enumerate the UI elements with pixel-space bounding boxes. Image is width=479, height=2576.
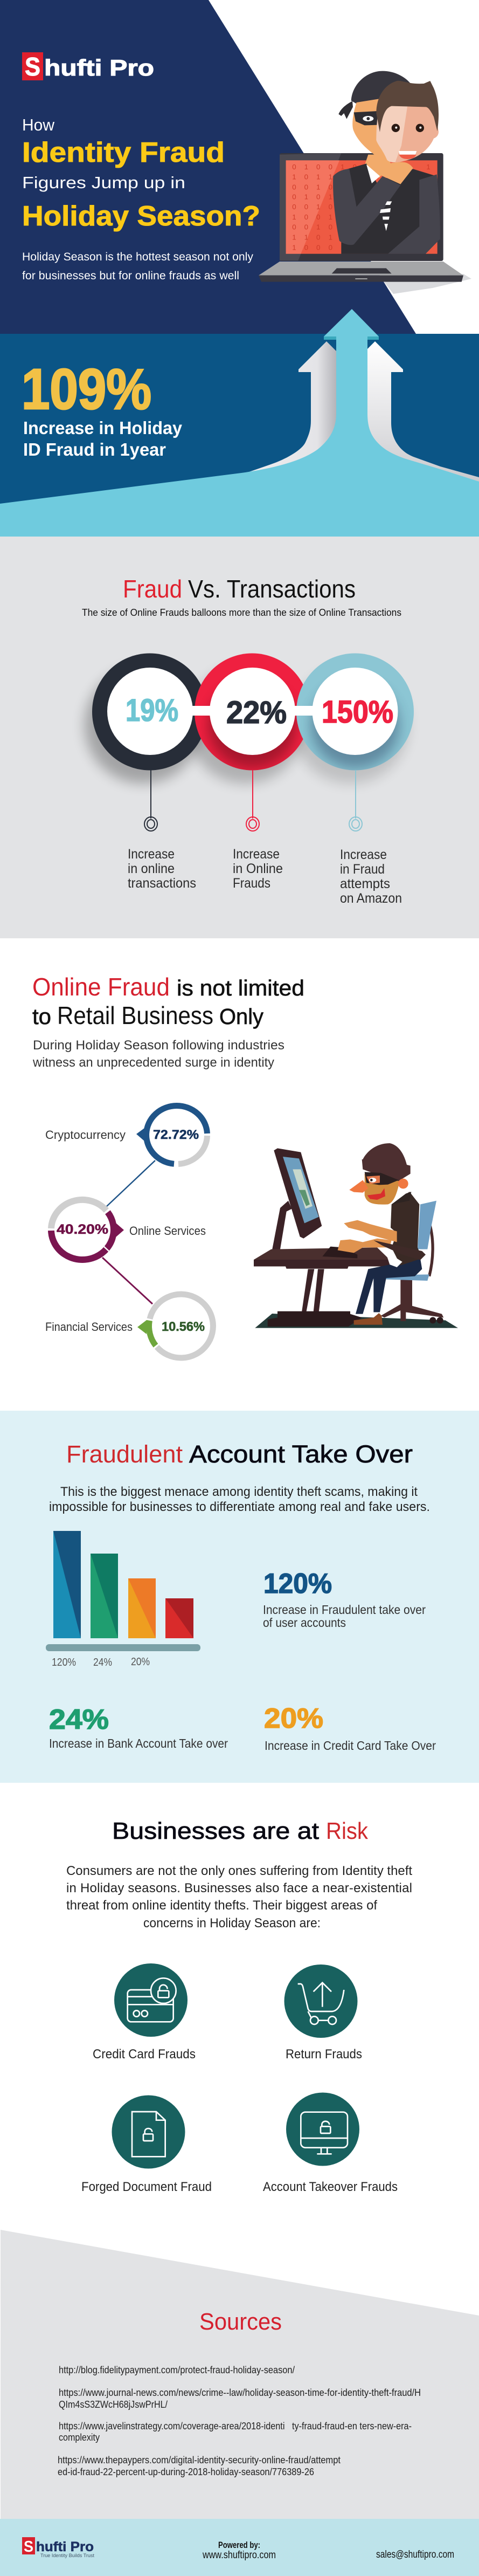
intro text [49, 1485, 430, 1514]
label: online services: Online Services [129, 1224, 206, 1238]
illustration: hacker at computer [254, 1143, 458, 1328]
intro text [66, 1864, 412, 1931]
heading: to [32, 1004, 51, 1029]
illustration: fraudster with mask in laptop: 1 [292, 243, 296, 251]
donut: online services [51, 1200, 124, 1260]
logo: Shufti Pro: hufti Pro [44, 55, 154, 80]
illustration: fraudster with mask in laptop: 0 [304, 213, 308, 221]
illustration: fraudster with mask in laptop: 0 [353, 163, 357, 171]
heading [123, 575, 356, 603]
arrow: left white [241, 341, 336, 475]
source list: https://www.thepaypers.com/digital-identity-security-online-fraud/attempt [58, 2455, 341, 2465]
illustration: fraudster with mask in laptop: 0 [316, 163, 320, 171]
illustration: fraudster with mask in laptop: 0 [292, 223, 296, 231]
illustration: fraudster with mask in laptop: 0 [316, 243, 320, 251]
heading: Risk [326, 1818, 369, 1844]
illustration: fraudster with mask in laptop: 0 [292, 193, 296, 201]
label: return frauds: Return Frauds [286, 2047, 362, 2062]
navy background [0, 0, 416, 334]
illustration: fraudster with mask in laptop: 1 [329, 213, 332, 221]
source list: https://www.javelinstrategy.com/coverage-area/2018-identi ty-fraud-fraud-en ters-new-era- [59, 2421, 412, 2431]
chart: bars: 120% [52, 1657, 76, 1668]
intro text: threat from online identity thefts. Their biggest areas of [66, 1898, 377, 1913]
illustration: fraudster with mask in laptop: 0 [304, 173, 308, 181]
illustration: fraudster with mask in laptop: 0 [304, 223, 308, 231]
illustration: fraudster with mask in laptop: 1 [316, 173, 320, 181]
label: amazon: Increase [340, 847, 387, 862]
stat: 20%: 20% [264, 1703, 323, 1734]
illustration: fraudster with mask in laptop: 1 [304, 233, 308, 242]
heading: Online Fraud [32, 973, 170, 1001]
illustration: fraudster with mask in laptop: 0 [329, 163, 332, 171]
arrow: right white [367, 341, 479, 485]
stat: 150%: 150% [322, 695, 393, 730]
label: amazon: attempts [340, 876, 390, 891]
logo: Shufti Pro footer [22, 2537, 94, 2558]
illustration: fraudster with mask in laptop: 1 [304, 193, 308, 201]
intro text: Consumers are not the only ones suffering from Identity theft [66, 1864, 412, 1878]
icon: account takeover monitor [286, 2092, 359, 2166]
label: online transactions [128, 847, 196, 891]
heading: is not limited [177, 976, 304, 1000]
intro text: impossible for businesses to differentiate among real and fake users. [49, 1500, 430, 1514]
panel: fraud vs transactions [0, 537, 479, 938]
label: 120% [263, 1603, 426, 1630]
illustration: fraudster with mask in laptop: 0 [329, 243, 332, 251]
powered by: www.shuftipro.com [202, 2550, 276, 2561]
illustration: fraudster with mask in laptop [259, 71, 463, 282]
logo: Shufti Pro footer: True Identity Builds Trust [40, 2553, 94, 2558]
illustration: fraudster with mask in laptop: 0 [329, 203, 332, 211]
label: online transactions: Increase [128, 847, 175, 862]
heading: Only [219, 1004, 263, 1029]
source list [58, 2365, 421, 2477]
label: 120%: of user accounts [263, 1616, 346, 1630]
illustration: fraudster with mask in laptop: 0 [292, 183, 296, 191]
laptop shadow [384, 274, 471, 294]
stat: 109%: 109% [22, 358, 151, 421]
label: amazon [340, 847, 402, 906]
heading: Businesses are at [112, 1818, 319, 1844]
logo: Shufti Pro footer: S [24, 2538, 33, 2556]
panel: hero [0, 0, 479, 334]
illustration: fraudster with mask in laptop: 0 [316, 233, 320, 242]
hero text [22, 251, 253, 282]
hero text: for businesses but for online frauds as well [22, 270, 239, 282]
source list: complexity [59, 2432, 100, 2443]
connector: red [246, 770, 259, 831]
illustration: fraudster with mask in laptop: 1 [329, 233, 332, 242]
title: Figures Jump up in [22, 173, 185, 192]
contact email: sales@shuftipro.com [376, 2549, 454, 2560]
chart: bars [46, 1531, 200, 1668]
panel: businesses at risk [0, 1783, 479, 2230]
heading: Fraudulent [66, 1440, 183, 1468]
donut: online services: 40.20% [57, 1222, 108, 1237]
icons: risk areas [112, 1963, 359, 2169]
title: Identity Fraud [22, 137, 225, 168]
label: online frauds: Increase [233, 847, 280, 862]
donut: cryptocurrency: 72.72% [153, 1128, 199, 1142]
heading: Retail Business [57, 1001, 213, 1029]
illustration: fraudster with mask in laptop: 0 [304, 203, 308, 211]
stat label: Increase in Holiday [23, 418, 183, 438]
icon: credit card [114, 1963, 188, 2037]
illustration: fraudster with mask in laptop: 0 [304, 243, 308, 251]
stat: 22%: 22% [226, 695, 287, 730]
label: forged document fraud: Forged Document Fraud [81, 2180, 212, 2194]
label: account takeover frauds: Account Takeover Frauds [263, 2180, 398, 2194]
subheading: The size of Online Frauds balloons more than the size of Online Transactions [82, 607, 401, 618]
panel: sources [1, 2230, 479, 2519]
title: Holiday Season? [22, 201, 260, 232]
stat: 120%: 120% [263, 1568, 332, 1599]
stat label: ID Fraud in 1year [23, 439, 166, 459]
intro text: During Holiday Season following industries [33, 1038, 284, 1053]
illustration: fraudster with mask in laptop: 1 [292, 173, 296, 181]
panel: online fraud industries [0, 938, 479, 1411]
label: amazon: in Fraud [340, 862, 385, 877]
title: How [22, 115, 55, 134]
illustration: fraudster with mask in laptop: 1 [292, 213, 296, 221]
illustration: fraudster with mask in laptop: 0 [329, 223, 332, 231]
illustration: fraudster with mask in laptop: 0 [316, 193, 320, 201]
heading: Account Take Over [189, 1440, 413, 1468]
label: 20%: Increase in Credit Card Take Over [265, 1739, 436, 1753]
label: financial services: Financial Services [45, 1320, 133, 1334]
label: credit card frauds: Credit Card Frauds [93, 2047, 196, 2062]
hero text: Holiday Season is the hottest season not only [22, 251, 253, 263]
panel: footer [0, 2519, 479, 2576]
intro text [32, 1038, 284, 1070]
connector: dark [144, 770, 157, 831]
illustration: fraudster with mask in laptop: 0 [292, 163, 296, 171]
title [22, 115, 260, 232]
chart: bars: 20% [131, 1656, 150, 1668]
illustration: fraudster with mask in laptop: 1 [329, 193, 332, 201]
logo: Shufti Pro [22, 52, 154, 81]
illustration: fraudster with mask in laptop: 1 [316, 183, 320, 191]
logo: Shufti Pro: S [25, 53, 40, 81]
heading [66, 1440, 413, 1468]
donut: financial services [137, 1294, 213, 1358]
connector lines [102, 1160, 155, 1304]
heading [32, 973, 304, 1029]
illustration: fraudster with mask in laptop: 1 [329, 173, 332, 181]
source list: http://blog.fidelitypayment.com/protect-fraud-holiday-season/ [59, 2365, 295, 2375]
heading: Vs. Transactions [188, 575, 356, 603]
illustration: fraudster with mask in laptop: 1 [341, 163, 344, 171]
illustration: fraudster with mask in laptop: 0 [304, 183, 308, 191]
stat: 19%: 19% [126, 693, 178, 728]
source list: QIm4sS3ZWcH68jJswPrHL/ [59, 2399, 168, 2410]
illustration: fraudster with mask in laptop: 1 [316, 203, 320, 211]
label: online frauds: Frauds [233, 876, 270, 891]
label: 24%: Increase in Bank Account Take over [49, 1736, 228, 1750]
source list: https://www.journal-news.com/news/crime--law/holiday-season-time-for-identity-theft-fraud/H [59, 2387, 421, 2398]
logo: Shufti Pro footer: hufti Pro [36, 2539, 94, 2554]
powered by: Powered by: [218, 2540, 260, 2550]
label: online frauds [233, 847, 283, 891]
illustration: fraudster with mask in laptop: 0 [316, 213, 320, 221]
icon: forged document [112, 2096, 185, 2169]
source list: ed-id-fraud-22-percent-up-during-2018-holiday-season/776389-26 [58, 2467, 314, 2477]
intro text: This is the biggest menace among identity theft scams, making it [60, 1485, 418, 1499]
panel: 109% banner [0, 309, 479, 537]
label: online transactions: in online [128, 861, 175, 876]
arrow: central light blue with base [0, 309, 479, 537]
powered by [202, 2540, 276, 2561]
donut: cryptocurrency [136, 1106, 207, 1164]
illustration: fraudster with mask in laptop: 1 [426, 163, 431, 171]
connector: blue [349, 770, 362, 831]
panel: fraudulent account take over [0, 1411, 479, 1783]
label: cryptocurrency: Cryptocurrency [45, 1128, 126, 1142]
heading: Fraud [123, 575, 182, 603]
icon: return cart [284, 1964, 358, 2038]
stat label [23, 418, 183, 459]
illustration: fraudster with mask in laptop: 1 [304, 163, 308, 171]
intro text: concerns in Holiday Season are: [143, 1916, 321, 1931]
label: online transactions: transactions [128, 876, 196, 891]
illustration: fraudster with mask in laptop: 1 [316, 223, 320, 231]
donut: financial services: 10.56% [162, 1320, 205, 1334]
stat: 24%: 24% [49, 1704, 109, 1735]
chart: three linked rings [85, 654, 414, 784]
label: amazon: on Amazon [340, 891, 402, 906]
intro text: witness an unprecedented surge in identity [32, 1055, 274, 1070]
illustration: fraudster with mask in laptop: 1 [292, 233, 296, 242]
illustration: fraudster with mask in laptop: 0 [292, 203, 296, 211]
label: online frauds: in Online [233, 861, 283, 876]
illustration: fraudster with mask in laptop: 0 [329, 183, 332, 191]
intro text: in Holiday seasons. Businesses also face a near-existential [66, 1881, 412, 1895]
heading: Sources [199, 2309, 282, 2335]
chart: bars: 24% [93, 1657, 112, 1668]
label: 120%: Increase in Fraudulent take over [263, 1603, 426, 1617]
